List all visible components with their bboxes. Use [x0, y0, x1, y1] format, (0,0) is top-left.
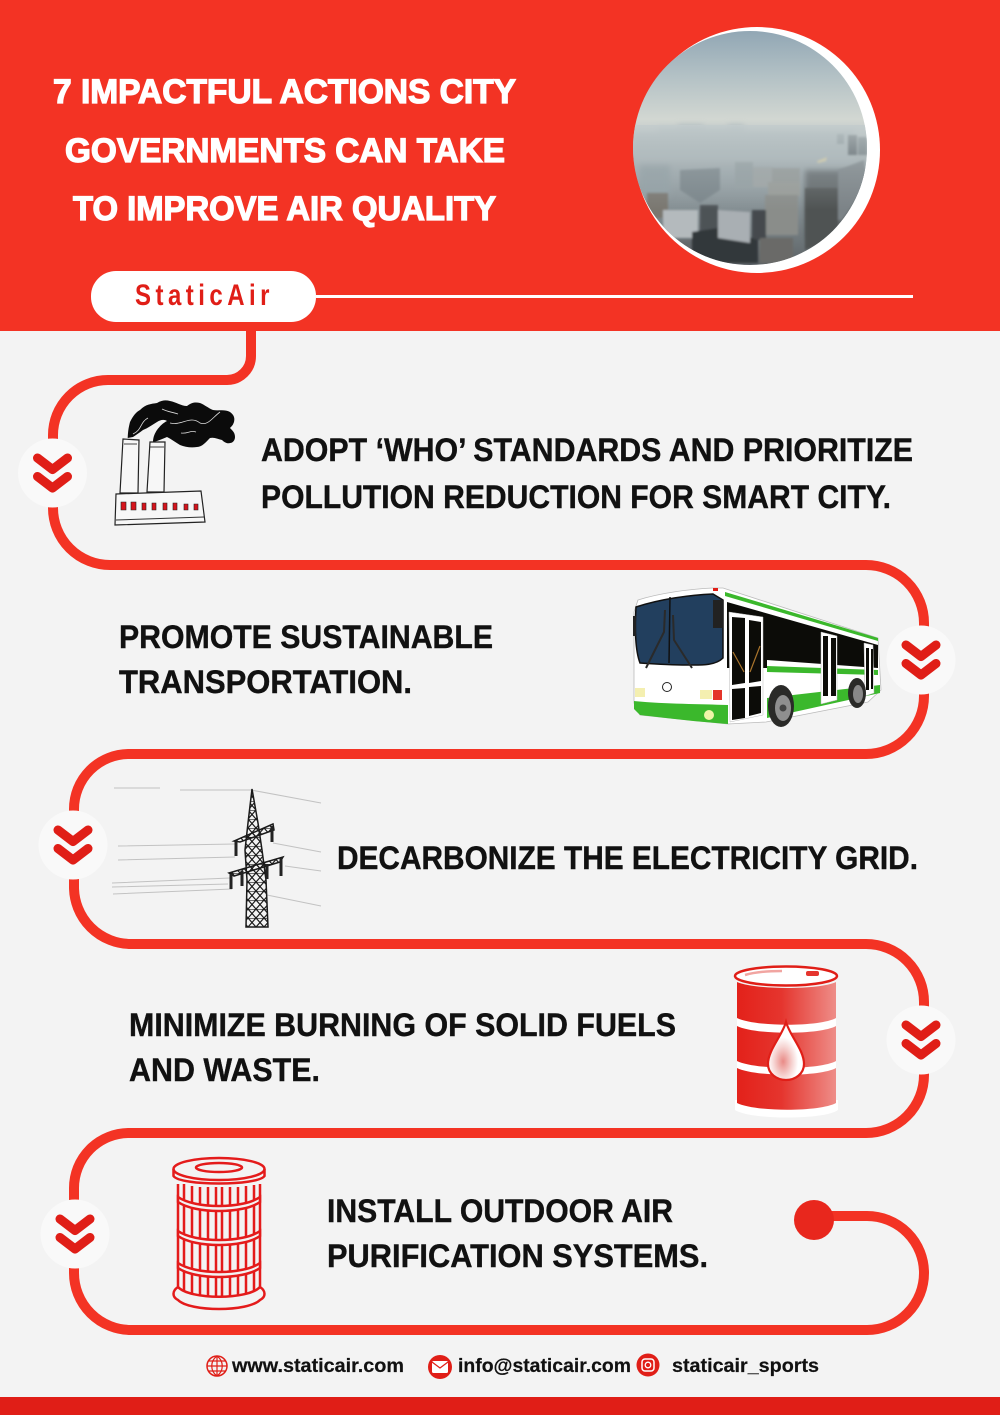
text: step 4: AND WASTE. — [129, 1052, 320, 1088]
text: step 5 — [327, 1193, 708, 1274]
photo: smoggy city skyline — [630, 27, 880, 273]
footer: instagram: staticair_sports — [672, 1356, 819, 1377]
footer: website: www.staticair.com — [231, 1356, 404, 1377]
text: step 4 — [129, 1007, 676, 1088]
logo pill: StaticAir: StaticAir — [135, 277, 274, 312]
text: step 4: MINIMIZE BURNING OF SOLID FUELS — [129, 1007, 676, 1043]
footer band — [0, 1397, 1000, 1415]
logo pill: StaticAir — [91, 271, 316, 322]
text: step 1: ADOPT ‘WHO’ STANDARDS AND PRIORITIZE — [261, 432, 913, 468]
path end dot — [794, 1200, 834, 1240]
text: step 2: PROMOTE SUSTAINABLE — [119, 619, 493, 655]
text: step 1 — [261, 432, 913, 515]
serpentine connector path — [53, 331, 924, 1330]
chevron badge 1 — [18, 438, 87, 508]
header band — [0, 0, 1000, 331]
chevron badge 5 — [40, 1200, 110, 1268]
footer: instagram — [636, 1354, 819, 1377]
icon: oil drum with drop — [735, 966, 838, 1118]
chevron badge 2 — [886, 626, 956, 694]
icon: city bus — [633, 588, 881, 727]
text: step 3: DECARBONIZE THE ELECTRICITY GRID. — [337, 840, 918, 876]
title: GOVERNMENTS CAN TAKE — [65, 132, 505, 170]
icon: air filter cartridge — [174, 1158, 264, 1309]
footer: email: info@staticair.com — [458, 1356, 631, 1377]
text: step 5: INSTALL OUTDOOR AIR — [327, 1193, 673, 1229]
logo rule — [316, 295, 913, 298]
title: TO IMPROVE AIR QUALITY — [73, 190, 496, 228]
icon: transmission tower — [112, 788, 321, 927]
chevron badge 3 — [38, 810, 108, 880]
icon: factory with smoke — [115, 400, 235, 525]
text: step 5: PURIFICATION SYSTEMS. — [327, 1238, 708, 1274]
title: 7 IMPACTFUL ACTIONS CITY — [53, 73, 516, 111]
text: step 2 — [119, 619, 493, 700]
chevron badge 4 — [886, 1006, 956, 1074]
text: step 2: TRANSPORTATION. — [119, 664, 412, 700]
text: step 1: POLLUTION REDUCTION FOR SMART CITY. — [261, 479, 891, 515]
title — [53, 73, 516, 228]
